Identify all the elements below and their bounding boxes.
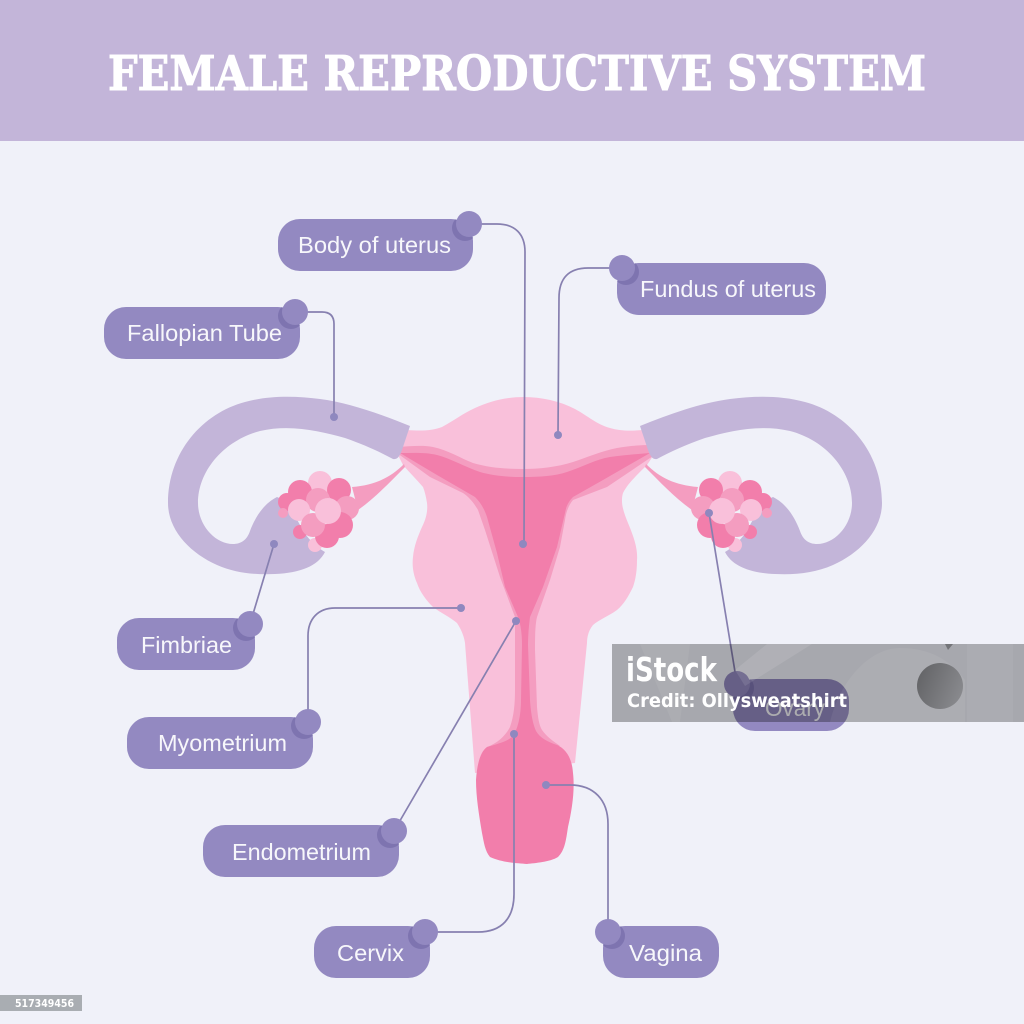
label: Fimbriae	[117, 611, 263, 670]
label: Fimbriae: Fimbriae	[141, 632, 232, 658]
label: Vagina: Vagina	[629, 940, 702, 966]
anatomy diagram	[168, 397, 882, 864]
watermark band	[612, 644, 1024, 722]
label: Fallopian Tube	[104, 299, 308, 359]
stock id tag	[0, 995, 82, 1011]
label: Endometrium	[203, 818, 407, 877]
leader lines	[250, 224, 737, 932]
label: Body of uterus: Body of uterus	[298, 232, 451, 258]
label: Body of uterus	[278, 211, 482, 271]
label: Fundus of uterus: Fundus of uterus	[640, 276, 816, 302]
uterus: middle layer	[397, 445, 653, 747]
label: Fallopian Tube: Fallopian Tube	[127, 320, 282, 346]
right ligament	[645, 464, 698, 510]
left ovary	[278, 471, 359, 552]
right fallopian tube and fimbriae	[640, 397, 882, 574]
watermark logo: iStock	[626, 650, 718, 689]
label: Vagina	[595, 919, 719, 978]
uterus: myometrium outer layer	[397, 397, 653, 773]
label: Ovary	[724, 671, 849, 731]
left ligament	[352, 464, 405, 510]
title: FEMALE REPRODUCTIVE SYSTEM	[108, 46, 926, 102]
anchor dots	[270, 413, 713, 789]
left fallopian tube and fimbriae	[168, 397, 410, 574]
label: Cervix: Cervix	[337, 940, 405, 966]
label: Endometrium: Endometrium	[232, 839, 371, 865]
label: Ovary: Ovary	[765, 695, 825, 721]
label: Fundus of uterus	[609, 255, 826, 315]
watermark credit: Credit: Ollysweatshirt	[627, 690, 847, 712]
label: Myometrium: Myometrium	[158, 730, 287, 756]
label: Myometrium	[127, 709, 321, 769]
label: Cervix	[314, 919, 438, 978]
stock id tag: 517349456	[15, 997, 74, 1010]
header banner	[0, 0, 1024, 141]
uterus: endometrium, cervical canal and vagina	[400, 453, 650, 864]
right ovary	[691, 471, 772, 552]
